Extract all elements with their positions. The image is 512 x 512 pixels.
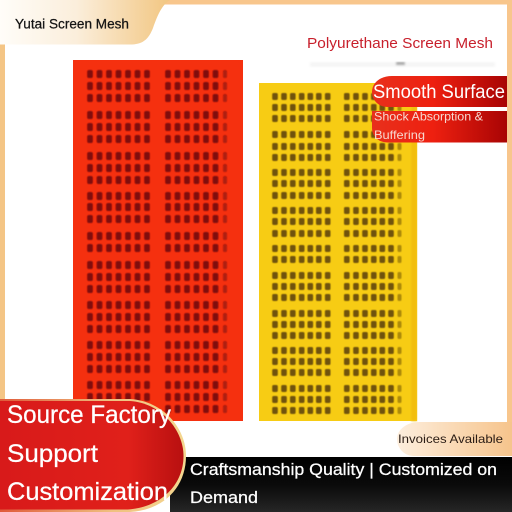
source factory pill	[0, 399, 186, 512]
black slogan bar: Craftsmanship Quality | Customized on	[190, 461, 497, 479]
brand name: Yutai Screen Mesh	[15, 16, 129, 32]
source factory pill: Source Factory	[7, 401, 171, 429]
source factory pill: Customization	[7, 478, 168, 506]
header banner	[0, 0, 170, 44]
smudge under title	[310, 62, 495, 67]
source factory pill: Support	[7, 440, 98, 468]
invoices badge: Invoices Available	[398, 432, 503, 446]
black slogan bar: Demand	[190, 489, 258, 507]
feature tag: shock absorption	[372, 110, 507, 142]
product: red polyurethane screen panel	[73, 60, 243, 421]
feature tag: smooth surface: Smooth Surface	[373, 82, 505, 103]
product: yellow polyurethane screen panel	[259, 83, 417, 421]
black slogan bar	[170, 457, 512, 512]
feature tag: shock absorption: Shock Absorption &	[374, 110, 483, 124]
feature tag: smooth surface	[372, 76, 507, 107]
feature tag: shock absorption: Buffering	[374, 128, 425, 142]
invoices badge	[397, 422, 512, 456]
product title: Polyurethane Screen Mesh	[307, 36, 493, 52]
